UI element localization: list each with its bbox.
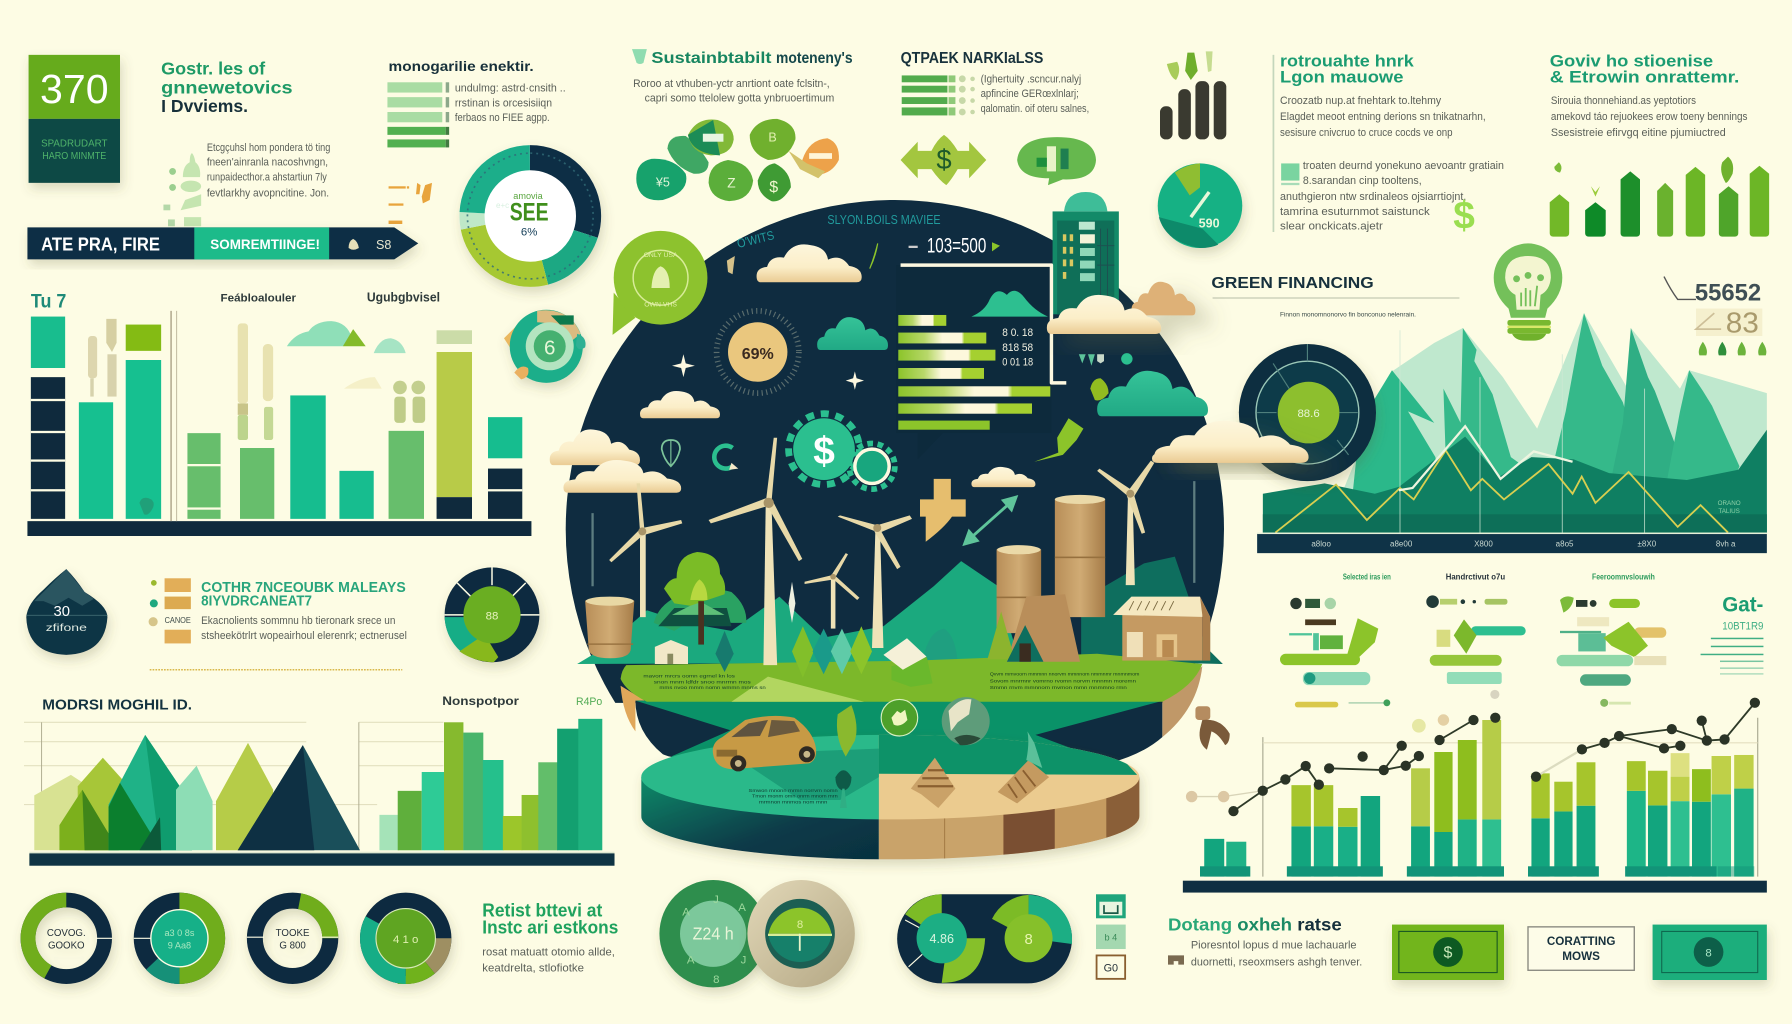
heading: rotrouahte — [1280, 51, 1415, 86]
chart: mountain area: ORANO — [1718, 500, 1741, 507]
text: markets body — [981, 73, 1089, 115]
legend: swatches — [149, 578, 191, 643]
small wooden hut — [655, 640, 688, 664]
button: teal note: 8 — [1705, 948, 1712, 960]
chart: mountains and bars lower left — [24, 719, 615, 866]
icon: navy drop: 30 — [53, 604, 70, 620]
text: retist: keatdrelta, stlofiotke — [482, 962, 584, 974]
text: dotang — [1191, 940, 1362, 969]
chart: stacked bars and lines — [1183, 690, 1767, 893]
text: markets body: apfincine GERœxlnlarj; — [981, 88, 1079, 100]
donut: covog: GOOKO — [48, 941, 85, 952]
heading: top left — [161, 58, 293, 116]
donut: tooke: G 800 — [279, 941, 306, 952]
icon: dollar sign: $ — [1453, 195, 1475, 238]
twin pie pill: 8 — [1024, 932, 1033, 948]
disc: z24h — [659, 880, 767, 987]
heading: legend title: 8IYVDRCANEAT7 — [201, 594, 312, 610]
text: sustainable body: Roroo at vthuben-yctr anrtiont oate fclsitn-, — [633, 78, 830, 90]
chart: large bar chart — [27, 317, 531, 536]
heading: goviv: & Etrowin onrattemr. — [1550, 67, 1739, 86]
button: coratting mows: CORATTING — [1547, 934, 1615, 948]
heading: sustainable: moteneny's — [776, 50, 853, 67]
heading: lower-left chart — [42, 694, 602, 714]
stat card: 370: 370 — [40, 66, 109, 112]
icon: leaf badge — [881, 699, 918, 736]
heading: dotang: Dotang oxheh ratse — [1168, 914, 1342, 934]
text block: rotrouahte: sesisure cnivcruo to cruce cocds ve onp — [1280, 127, 1453, 139]
text block: bullets — [207, 142, 330, 200]
text: bar list labels: ferbaos no FIEE agpp. — [455, 112, 550, 124]
icons: leaf blobs: B — [768, 131, 777, 145]
heading: legend title — [201, 580, 406, 610]
donut: tooke: TOOKE — [276, 928, 310, 939]
scene: green speech badge: OWN VHS — [644, 301, 677, 308]
donut: tooke — [247, 901, 338, 976]
text: dotang: Pioresntol lopus d mue lachauarle — [1191, 940, 1357, 952]
heading: goviv — [1550, 51, 1739, 86]
heading: gat: Gat- — [1722, 591, 1763, 616]
donut: covog — [28, 900, 112, 977]
scene stat: 103-500 — [727, 233, 1000, 274]
chart axis band — [1257, 533, 1767, 553]
chart: mountain area — [1263, 313, 1767, 533]
icon: tower — [1053, 192, 1119, 314]
icon: wooden tents — [911, 731, 1049, 808]
stats: top right numbers: 83 — [1726, 308, 1759, 340]
scene: green speech badge — [613, 231, 707, 335]
scene heading: SLYON.BOILS MAVIEE — [827, 213, 941, 227]
text block: bullets: fevtlarkhy avopncitine. Jon. — [207, 188, 329, 200]
chart: large bar chart heading labels: Ugubgbvisel — [367, 291, 440, 305]
text block: bullets: runpaidecthor.a ahstartiun 7ly — [207, 172, 327, 184]
text block: bullets: fneen'ainranla nacoshvngn, — [207, 157, 328, 169]
icon: car — [713, 716, 816, 771]
icon: small hearts — [1079, 353, 1133, 366]
banner arrow: ATE PRA, FIRE — [41, 233, 160, 254]
text: retist — [482, 946, 615, 974]
small note: gat: 10BT1R9 — [1722, 621, 1763, 633]
chart: large bar chart heading labels: Feábloalouler — [221, 293, 297, 305]
heading: rotrouahte: Lgon mauowe — [1280, 67, 1403, 86]
text: markets body: (Ighertuity .scncur.nalyj — [981, 73, 1081, 85]
scene: coin sun — [717, 311, 799, 393]
disc: z24h: J — [713, 894, 719, 906]
scene: bubble chart panel: 818 58 — [1002, 342, 1033, 354]
heading: monogarilie: monogarilie enektir. — [389, 59, 534, 75]
tiny text: plate: Tmon monm omn onrm mnom mrn — [752, 794, 839, 799]
button: coratting mows — [1528, 927, 1634, 970]
chart axis band: a8e00 — [1390, 539, 1413, 548]
decoration: pale objects over bars — [88, 311, 425, 521]
text block: rotrouahte lower: slear onckicats.ajetr — [1280, 221, 1383, 233]
abstract process group three — [1557, 596, 1666, 707]
hills — [577, 557, 1223, 664]
twin pie pill: 4.86 — [929, 932, 954, 946]
heading: lower-left chart: R4Po — [576, 696, 602, 708]
disc: z24h: 8 — [713, 974, 719, 986]
banner arrow — [27, 227, 418, 259]
donut: top centre-left — [459, 145, 601, 287]
chart: arrow column bars — [1550, 157, 1769, 237]
bar list: markets — [902, 75, 975, 115]
icon stack: small squares: b 4 — [1105, 933, 1117, 943]
tiny text: platform right — [990, 671, 1140, 690]
chart axis band: X800 — [1474, 539, 1493, 548]
abstract process group one — [1280, 598, 1390, 707]
text: sustainable body: capri somo ttelolew gotta ynbruoertimum — [645, 93, 834, 105]
disc: z24h: Z24 h — [693, 923, 734, 943]
text block: rotrouahte: Elagdet meoot entning derions sn tnikatnarhn, — [1280, 111, 1486, 123]
chart: large bar chart heading labels — [31, 290, 440, 312]
icon: navy drop — [26, 569, 107, 655]
icons: leaf blobs: ¥5 — [655, 175, 670, 189]
scene: coin sun: 69% — [742, 346, 774, 363]
text: retist: rosat matuatt otomio allde, — [482, 946, 615, 958]
icon: double arrow — [965, 497, 1016, 544]
text: legend body: stsheekötrlrt wopeаirhoul elerenrk; ectnerusel — [201, 630, 407, 642]
icon: small brown — [1168, 955, 1184, 965]
heading: sustainable — [632, 49, 853, 67]
small chart group labels: Selected iras ien — [1343, 571, 1391, 581]
icon: circular arrow and balloon — [662, 440, 738, 470]
scene stat: 103-500: 103=500 — [927, 233, 986, 258]
dial: 88.6 — [1239, 344, 1376, 481]
text block: rotrouahte lower: anuthgieron ntw srdinaleos ojsiarrtiojnt, — [1280, 191, 1466, 203]
small note: gat — [1701, 621, 1763, 675]
donut: teal centre: 9 Aa8 — [168, 941, 191, 951]
tiny text: platform left: snon mnm ldfdr snoo mnrmn mos — [654, 679, 751, 684]
text: bar list labels — [455, 82, 566, 124]
small chart group labels: Feeroomnvslouwih — [1592, 571, 1655, 581]
scene: bubble chart panel: 8 0. 18 — [1002, 327, 1033, 339]
scene: bubble chart panel — [896, 265, 1066, 459]
legend: swatches: CANOE — [165, 615, 191, 625]
icon: brown figure — [1195, 706, 1230, 750]
donut: top centre-left: e+c — [496, 201, 509, 210]
text: legend body — [201, 615, 407, 642]
scene label: owits: O'WITS — [736, 228, 776, 251]
disc: tan ring gauge: 8 — [797, 919, 803, 931]
lower plate — [641, 731, 1139, 864]
tiny text: plate: mrmnon mnmos nom mnn — [759, 799, 828, 804]
abstract process group two — [1426, 595, 1526, 684]
text: legend body: Ekacnolients sommnu hb tieronark srece un — [201, 615, 395, 627]
disc: z24h: J — [741, 954, 746, 966]
heading: top left: gnnewetovics — [161, 78, 293, 98]
pie: centre-left — [445, 567, 539, 662]
button: green note: $ — [1444, 945, 1453, 962]
heading: top left: Gostr. les of — [161, 58, 265, 78]
tiny text: plate — [749, 788, 839, 804]
icon: tan lightning plus — [920, 479, 966, 542]
heading: retist: Retist bttevi at — [482, 900, 603, 921]
turbines — [609, 438, 1154, 665]
chart: mountain area: TALIUS — [1718, 508, 1740, 515]
banner arrow: SOMREMTIINGE! — [210, 237, 320, 253]
text: dotang: duornetti, rseoxmsers ashgh tenver. — [1191, 957, 1362, 969]
pie: centre-left: 88 — [486, 610, 498, 622]
text block: bullets: Etcgçuhsl hom pondera tö ting — [207, 142, 330, 154]
icon: dollar gears — [789, 414, 895, 489]
scene: cabin and tent — [987, 594, 1080, 662]
stat card: 370: HARO MINMTE — [42, 151, 107, 162]
text block: rotrouahte — [1280, 95, 1486, 139]
icons: leaf blobs: $ — [769, 179, 778, 196]
stat card: 370: SPADRUDART — [41, 138, 107, 149]
text block: goviv: amekovd táo rejuokees erow toeny bennings — [1551, 111, 1748, 123]
disc: tan ring gauge — [747, 880, 855, 987]
icon: leaf and dark tree — [835, 705, 857, 808]
chart axis band: a8o5 — [1556, 539, 1574, 548]
chart axis band: ±8X0 — [1638, 539, 1657, 548]
button: green note — [1392, 925, 1504, 980]
text: bar list labels: rrstinan is orcesisiiqn — [455, 97, 552, 109]
icon: green pie: 590 — [1199, 216, 1220, 230]
heading: legend title: COTHR 7NCEOUBK MALEAYS — [201, 580, 406, 596]
stat card: 370 — [29, 55, 120, 183]
small chart group labels — [1343, 571, 1655, 581]
chart axis band: 8vh a — [1716, 539, 1736, 548]
icon: stars — [672, 354, 864, 390]
dial: 88.6: 88.6 — [1297, 408, 1320, 420]
icon: green tent — [883, 638, 933, 687]
bar list: top — [387, 82, 449, 147]
scene: platform with ground and bowl — [621, 654, 1202, 774]
financing rule and caption: Finnon monomnonorvo fin bonconuo nelenrain. — [1280, 312, 1416, 319]
icon: green leaf — [1034, 378, 1109, 462]
tiny text: platform left — [643, 674, 767, 690]
icon stack: small squares: G0 — [1104, 962, 1118, 974]
tiny text: platform right: Qvvm mmvoorn mmmnn nnorvm mmnnom nmmnmr mnmnmom — [990, 671, 1140, 676]
heading: retist — [482, 900, 618, 938]
silos — [585, 495, 1105, 658]
text block: rotrouahte lower: troaten deurnd yonekuno aevoantr gratiain — [1303, 160, 1504, 172]
icon: green pie — [1158, 163, 1242, 248]
icon: capsule bars with leaves — [1160, 51, 1226, 139]
disc: z24h: A — [682, 906, 690, 918]
text block: goviv — [1551, 95, 1748, 139]
donut: top centre-left: amovia — [513, 191, 544, 201]
icon: double arrow with dollar — [901, 135, 986, 185]
heading: top left: I Dvviems. — [161, 96, 248, 116]
icon stack: small squares — [1096, 894, 1126, 979]
divider: right column — [1273, 55, 1274, 232]
stats: top right numbers: 55652 — [1695, 280, 1761, 307]
banner arrow: S8 — [376, 238, 391, 252]
icons: pale bullets — [163, 153, 201, 226]
dotted rule — [150, 669, 402, 671]
stats: top right numbers — [1664, 277, 1762, 340]
scene: house — [1113, 597, 1210, 661]
heading: lower-left chart: Nonspotpor — [442, 694, 519, 708]
donut: covog: COVOG. — [47, 928, 86, 939]
button: coratting mows: MOWS — [1562, 949, 1600, 963]
icon: turtle ornament — [504, 310, 586, 383]
tiny text: platform right: Smmn rnvm mmnnom rnvmon mmn mnmmno rmn — [990, 685, 1127, 690]
text: sustainable body — [633, 78, 834, 105]
text block: goviv: Sirouia thonnehiand.as yeptotiors — [1551, 95, 1697, 107]
donut: top centre-left: 6% — [521, 226, 537, 238]
icon: orange marks — [389, 183, 432, 224]
icon: globe — [942, 697, 990, 745]
tiny text: platform left: mavorr mrcrs oomn egrnel kn los — [643, 674, 735, 679]
icon: tree — [654, 552, 746, 645]
chart axis band: a8loo — [1311, 539, 1331, 548]
heading: rotrouahte: rotrouahte hnrk — [1280, 51, 1415, 70]
clouds — [550, 244, 1309, 493]
heading: sustainable: Sustainbtabilt — [651, 50, 771, 67]
tiny text: plate: Smwon mnonn mrmn norrvm nomn — [749, 788, 839, 793]
icon: navy drop: zfifone — [46, 623, 87, 634]
twin pie pill — [897, 894, 1072, 983]
small chart group labels: Handrctivut o7u — [1446, 571, 1505, 581]
donut: top centre-left: SEE — [510, 199, 549, 227]
text block: rotrouahte lower: tamrina esuturnmot saistunck — [1280, 206, 1430, 218]
chart: large bar chart heading labels: Tu 7 — [31, 290, 66, 312]
scene: green speech badge: ONLY USA — [644, 252, 678, 259]
button: teal note — [1653, 925, 1767, 980]
icon: gem trees — [715, 626, 872, 678]
heading: green financing: GREEN FINANCING — [1211, 275, 1374, 292]
heading: retist: Instc ari estkons — [482, 917, 618, 938]
heading: markets: QTPAEK NARKIaLSS — [901, 50, 1043, 67]
disc: z24h: A — [738, 902, 746, 914]
icon: green square — [1281, 163, 1299, 185]
icon: dollar gears: $ — [813, 430, 835, 473]
central scene: night sky circle — [566, 200, 1224, 703]
scene: bubble chart panel: 0 01 18 — [1002, 357, 1033, 369]
donut: multi-colour: 4 1 o — [393, 934, 418, 946]
icon: lightbulb — [1494, 243, 1562, 341]
disc: z24h: A — [687, 954, 695, 966]
icons: leaf blobs: Z — [727, 175, 736, 190]
text: bar list labels: undulmg: astrd·cnsith .. — [455, 82, 566, 94]
text block: rotrouahte lower: 8.sarandan cinp tooltens, — [1303, 175, 1422, 187]
icons: leaf blobs — [636, 119, 839, 201]
tiny text: platform left: mms nvoo mmm nomn wmmn mnms sn — [659, 685, 767, 690]
icon: speech bubble — [1017, 137, 1096, 185]
donut: multi-colour — [368, 901, 443, 976]
text block: goviv: Ssesistreie efirvgq eitine pjumiuctred — [1551, 127, 1726, 139]
icon: turtle ornament: 6 — [544, 336, 555, 359]
heading: goviv: Goviv ho stioenise — [1550, 51, 1713, 70]
text block: rotrouahte: Croozatb nup.at fnehtark to.ltehmy — [1280, 95, 1442, 107]
donut: teal centre: a3 0 8s — [164, 928, 195, 938]
icon: double arrow with dollar: $ — [936, 144, 952, 175]
text: markets body: qalomatin. oif oteru salnes, — [981, 103, 1089, 115]
tiny text: platform right: Sovom mnrmnr vomrno rvomn norvm mnnmn moremn — [990, 678, 1137, 683]
heading: lower-left chart: MODRSI MOGHIL ID. — [42, 698, 192, 714]
donut: teal centre — [134, 902, 216, 975]
icon: flame row — [1699, 342, 1766, 355]
text block: rotrouahte lower — [1280, 160, 1504, 233]
